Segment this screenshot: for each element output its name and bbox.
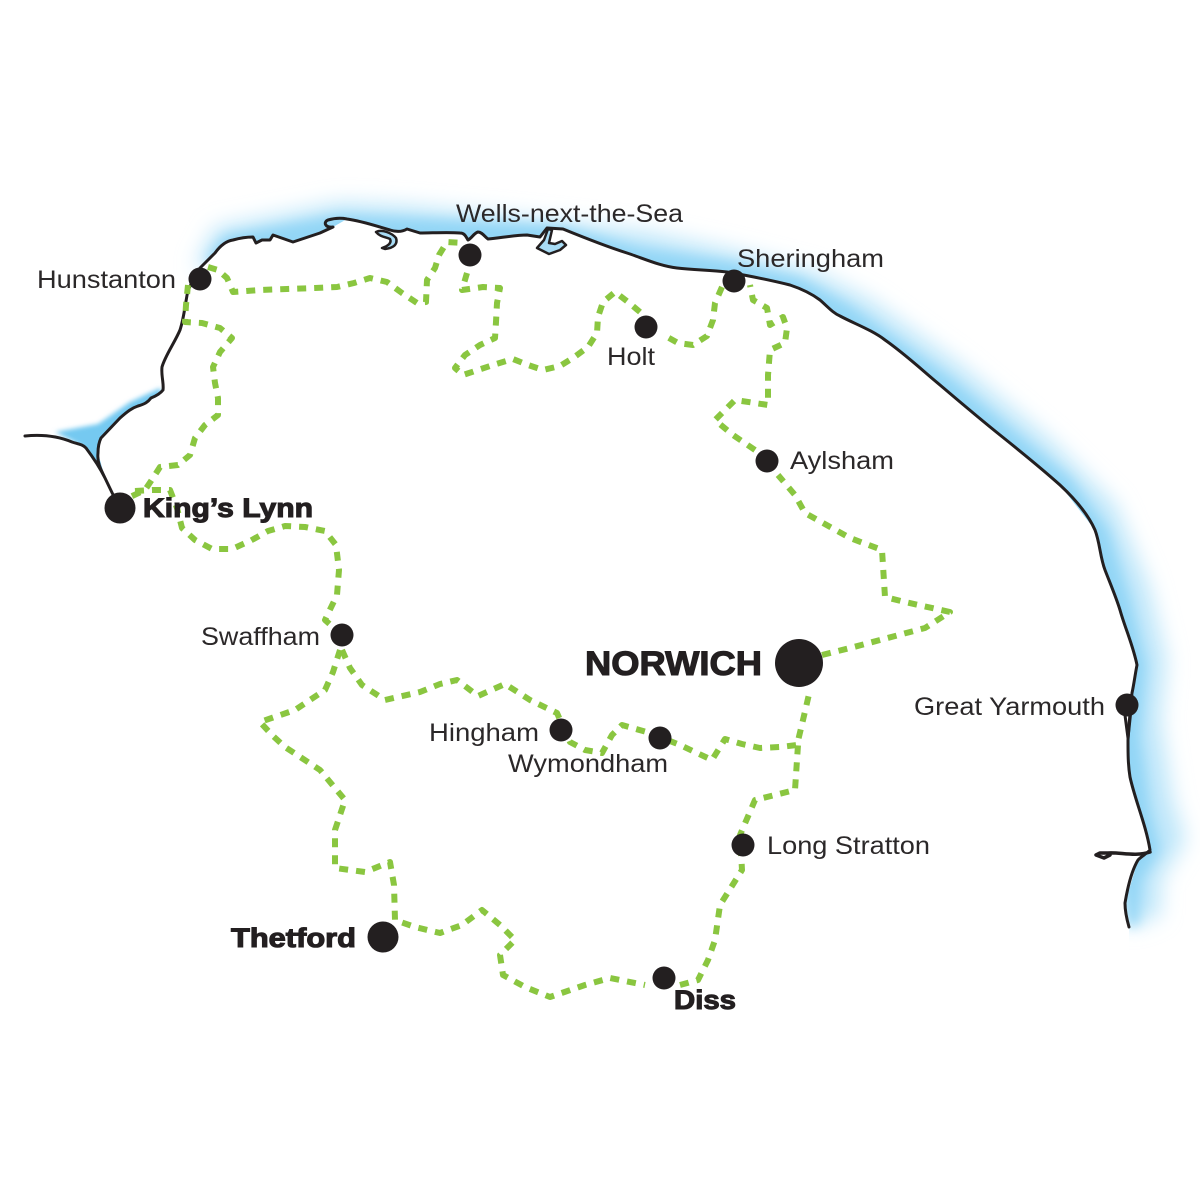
town markers bbox=[104, 244, 1138, 990]
town labels: Sheringham bbox=[737, 245, 884, 273]
town labels: Holt bbox=[607, 343, 655, 371]
town labels bbox=[37, 200, 1105, 1015]
town labels: Great Yarmouth bbox=[914, 693, 1105, 721]
town labels: NORWICH bbox=[585, 645, 762, 683]
coastline bbox=[25, 218, 1150, 927]
town labels: Swaffham bbox=[201, 623, 320, 651]
town labels: Hunstanton bbox=[37, 266, 176, 294]
town labels: Aylsham bbox=[790, 447, 894, 475]
town labels: Long Stratton bbox=[767, 832, 930, 860]
sea shading bbox=[55, 203, 1185, 927]
town labels: Thetford bbox=[231, 923, 356, 953]
town labels: Wymondham bbox=[508, 750, 668, 778]
green walking route bbox=[130, 242, 950, 997]
land mask bbox=[0, 219, 1150, 1200]
town labels: King’s Lynn bbox=[143, 493, 313, 523]
town labels: Hingham bbox=[429, 719, 539, 747]
town labels: Wells-next-the-Sea bbox=[456, 200, 683, 228]
town labels: Diss bbox=[674, 985, 736, 1015]
estuaries bbox=[376, 229, 566, 254]
